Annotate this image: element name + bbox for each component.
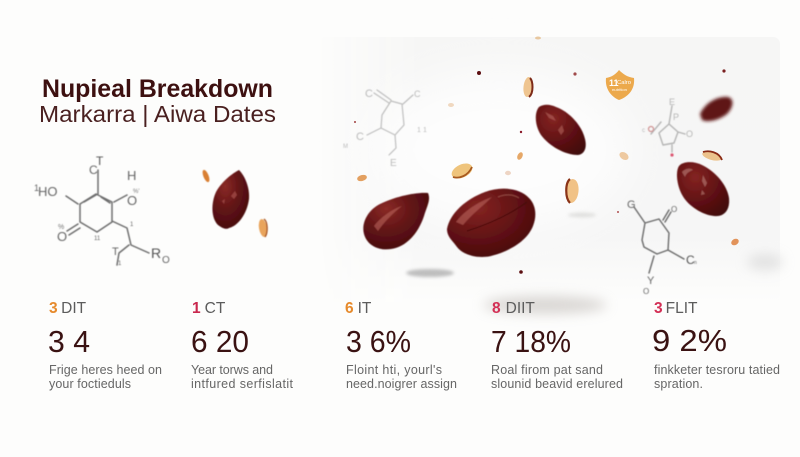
- molecule diagram: upper right faint: E: [669, 97, 675, 107]
- molecule diagram: upper right faint: O: [686, 129, 693, 139]
- icon: orange shield badge: nutrition: [612, 88, 627, 92]
- stat 4 value: 7 18%: [491, 324, 571, 359]
- date: upper centre: [536, 105, 586, 155]
- molecule diagram: faint upper left of hero: C: [365, 88, 373, 100]
- stat 5 value: 9 2%: [652, 323, 727, 358]
- stat 1 value: 3 4: [48, 324, 90, 359]
- stat 4 description: Roal firom pat sand: [491, 363, 603, 377]
- date: right: [677, 162, 729, 216]
- molecule diagram: faint upper left of hero: C: [356, 131, 364, 143]
- molecule diagram: lower right: C: [686, 253, 695, 267]
- stat 4 description: slounid beavid erelured: [491, 377, 623, 391]
- molecule diagram: lower right: G: [627, 199, 636, 211]
- stat 2 description: intfured serfislatit: [191, 377, 294, 391]
- molecule diagram: lower right: n: [694, 260, 697, 266]
- molecule diagram: left: C: [89, 163, 98, 177]
- title: Nupieal Breakdown: [42, 75, 273, 103]
- date: large centre: [447, 189, 535, 257]
- molecule diagram: left: %': [133, 189, 139, 195]
- stat 1 label: 3DIT: [49, 300, 87, 317]
- molecule diagram: left: O: [57, 229, 67, 244]
- stat column 1: [48, 300, 162, 391]
- stat 2 value: 6 20: [191, 324, 249, 359]
- molecule diagram: left: H: [127, 168, 136, 183]
- molecule diagram: lower right: O: [671, 205, 677, 214]
- molecule diagram: lower right: Y: [647, 275, 655, 287]
- stat 5 label: 3FLIT: [654, 300, 698, 317]
- stat 2 description: Year torws and: [191, 363, 273, 377]
- stat column 2: [191, 300, 294, 391]
- stat 2 label: 1 CT: [192, 300, 226, 317]
- molecule diagram: left: O: [127, 193, 137, 208]
- molecule diagram: left: HO: [38, 184, 58, 199]
- date: large left: [363, 193, 429, 249]
- molecule diagram: faint upper left of hero: E: [390, 158, 397, 169]
- molecule diagram: left: 1: [34, 183, 39, 193]
- stat column 4: [491, 300, 623, 391]
- molecule diagram: left: O: [162, 255, 170, 266]
- molecule diagram: left: [34, 154, 170, 267]
- molecule diagram: upper right faint: P: [673, 112, 679, 122]
- molecule diagram: faint upper left of hero: M: [343, 144, 348, 150]
- molecule diagram: upper right faint: [642, 97, 693, 157]
- molecule diagram: left: T: [96, 154, 104, 168]
- panel: hero image background: [405, 211, 782, 319]
- stat column 5: [652, 300, 780, 391]
- molecule diagram: lower right: O: [643, 287, 649, 296]
- stat 3 value: 3 6%: [346, 324, 411, 359]
- stat 1 description: Frige heres heed on: [49, 363, 162, 377]
- seeds and particles: [354, 36, 740, 274]
- stat 3 label: 6 IT: [345, 300, 372, 317]
- icon: orange shield badge: Calro: [617, 80, 631, 86]
- molecule diagram: faint upper left of hero: [343, 88, 427, 169]
- stat 4 label: 8 DIIT: [492, 300, 535, 317]
- molecule diagram: left: 1: [118, 261, 122, 267]
- molecule diagram: left: 11: [94, 236, 101, 242]
- icon: orange shield badge: 11: [609, 78, 619, 88]
- date: blurred upper right: [700, 97, 732, 121]
- molecule diagram: left: T: [112, 246, 119, 258]
- stat 3 description: need.noigrer assign: [346, 377, 457, 391]
- molecule diagram: left: 1: [130, 222, 134, 228]
- date: left single with seeds: [201, 169, 269, 238]
- stat 3 description: Floint hti, yourl's: [346, 363, 442, 377]
- stat 5 description: spration.: [654, 377, 703, 391]
- molecule diagram: faint upper left of hero: C: [414, 89, 421, 99]
- molecule diagram: faint upper left of hero: 1: [417, 127, 421, 134]
- title: [39, 75, 276, 127]
- subtitle: Markarra | Aiwa Dates: [39, 101, 276, 127]
- molecule diagram: upper right faint: c: [642, 128, 645, 134]
- molecule diagram: faint upper left of hero: 1: [423, 127, 427, 134]
- stat 1 description: your foctieduls: [49, 377, 131, 391]
- icon: orange shield badge: [606, 70, 634, 100]
- molecule diagram: left: %: [58, 224, 64, 231]
- stat column 3: [345, 300, 457, 391]
- molecule diagram: left: R: [151, 245, 161, 261]
- stat 5 description: finkketer tesroru tatied: [654, 363, 780, 377]
- molecule diagram: lower right: [627, 199, 697, 296]
